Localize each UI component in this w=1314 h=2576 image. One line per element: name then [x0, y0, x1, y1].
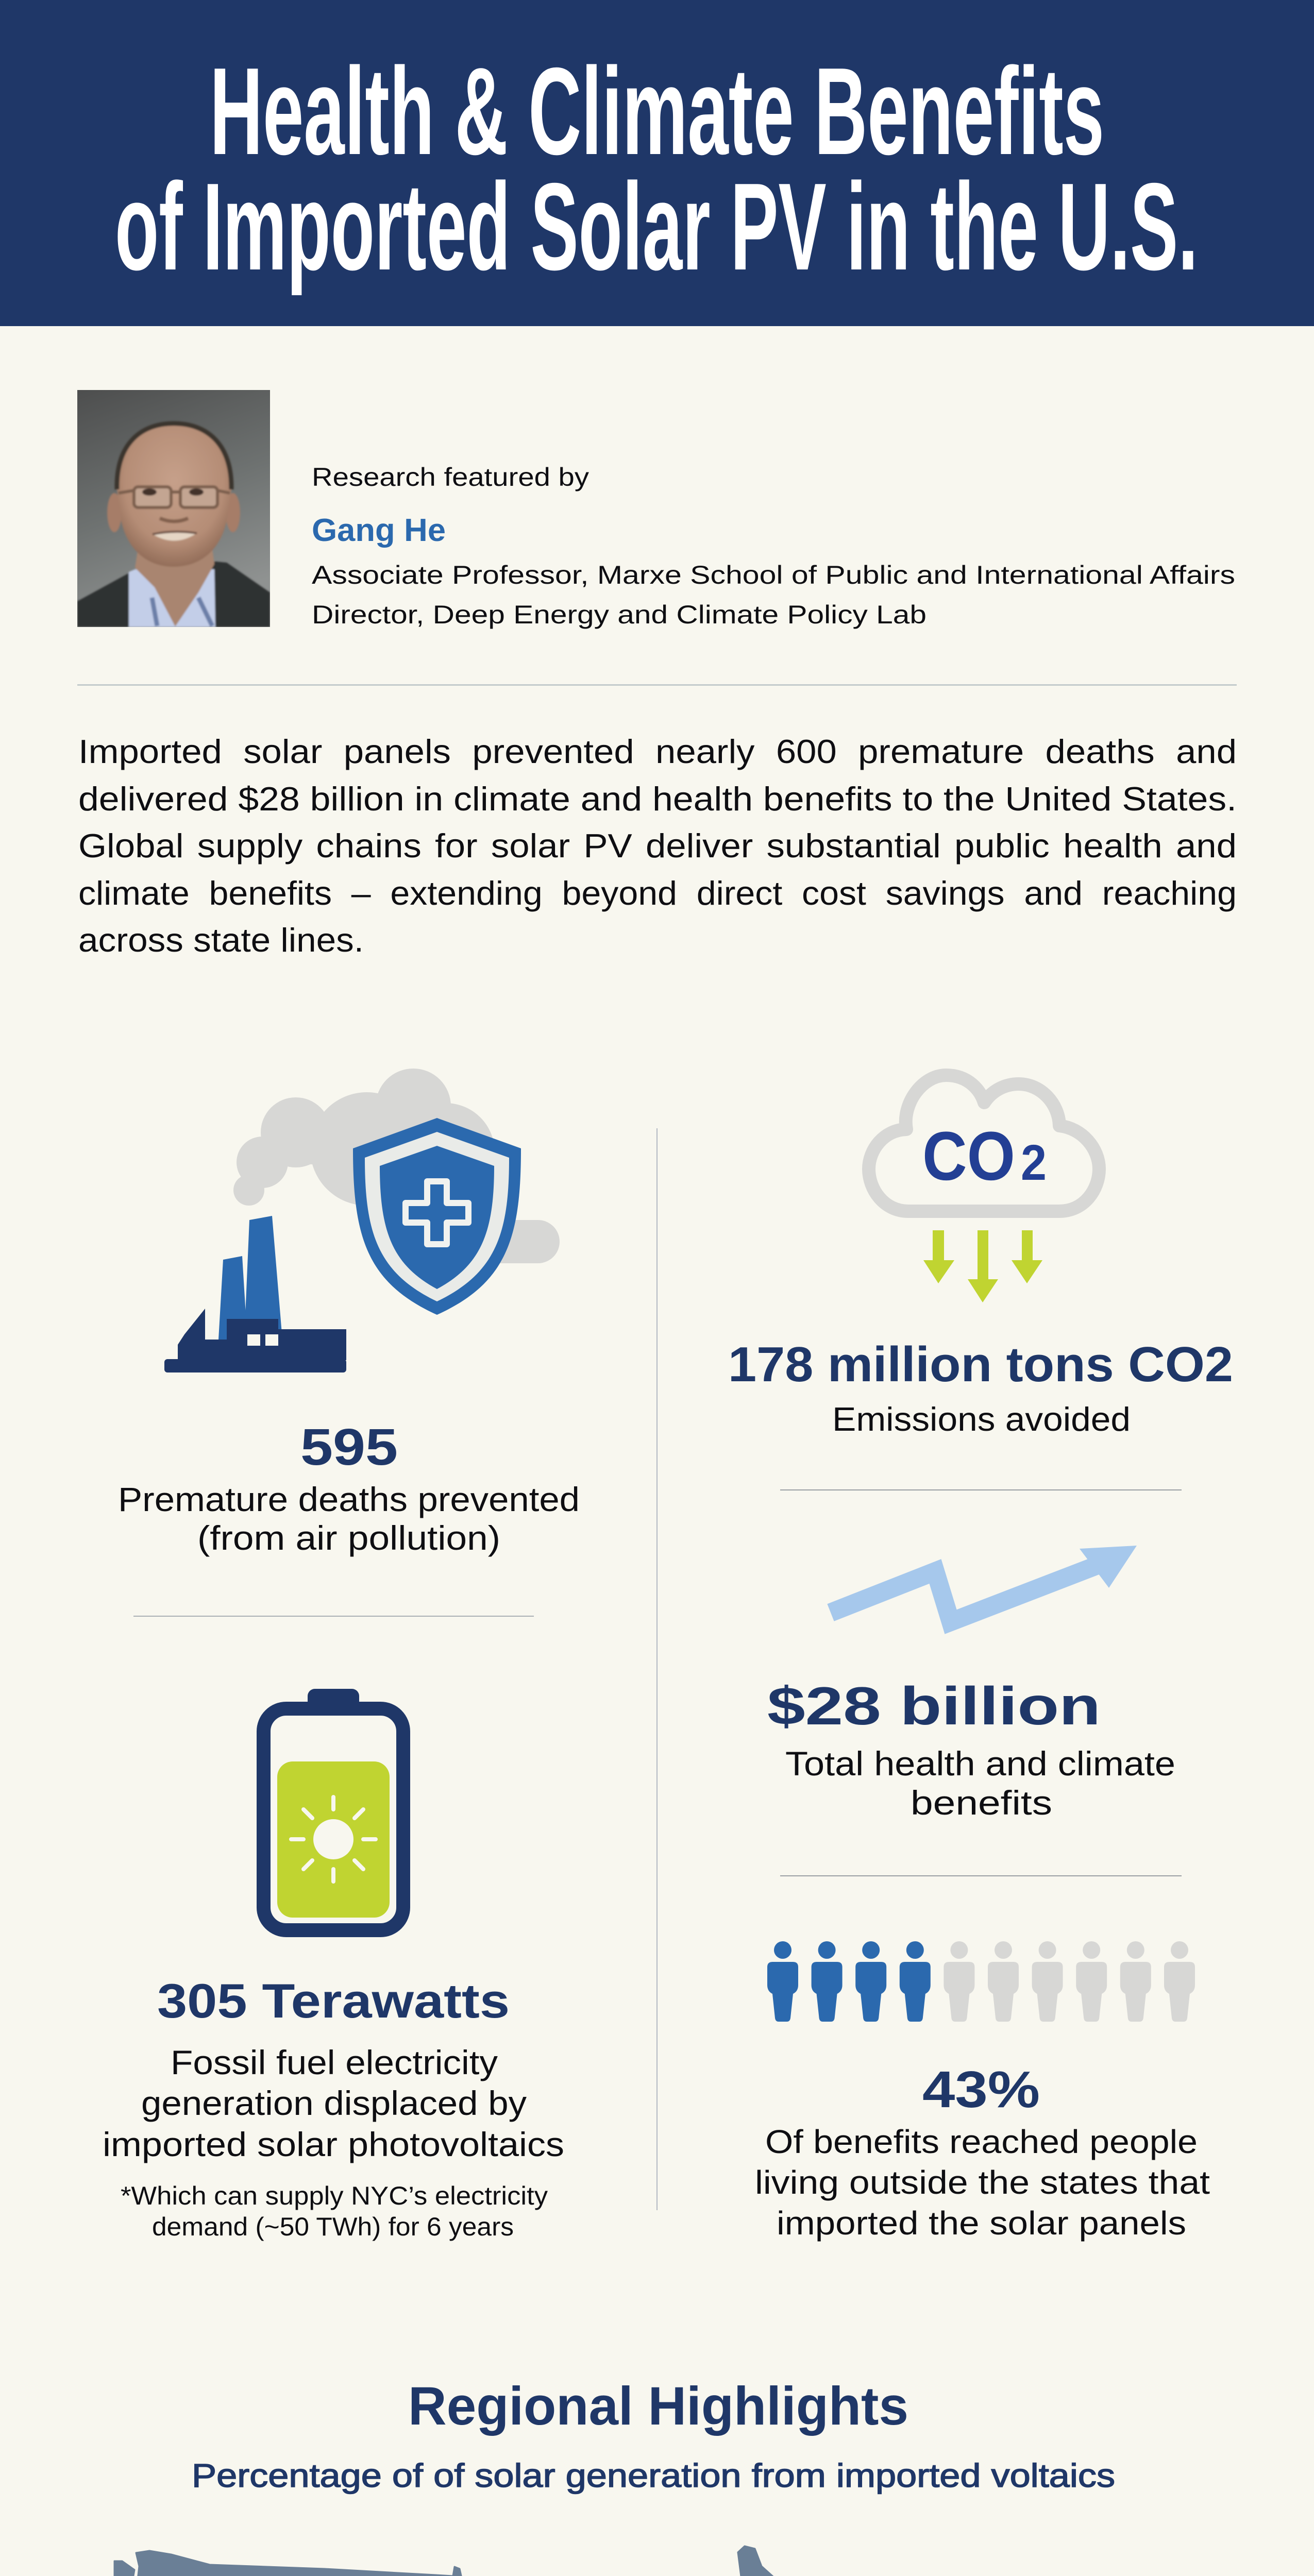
icon: CO2 cloud with down arrows — [869, 1075, 1099, 1302]
icon: smoke cloud, factory and health shield — [164, 1069, 560, 1372]
icon: rising arrow — [831, 1546, 1137, 1622]
panel: fossil fuel generation displaced: generation displaced by — [141, 2084, 527, 2122]
panel: fossil fuel generation displaced: 305 Terawatts — [157, 1974, 510, 2028]
icon: CO2 cloud with down arrows: 2 — [1021, 1134, 1047, 1191]
intro paragraph: delivered $28 billion in climate and health benefits to the United States. — [78, 780, 1237, 818]
intro paragraph: climate benefits – extending beyond direct cost savings and reaching — [78, 874, 1237, 912]
panel: benefits outside states: Of benefits reached people — [765, 2123, 1198, 2160]
panel: premature deaths prevented: Premature deaths prevented — [118, 1480, 580, 1518]
panel: premature deaths prevented: (from air pollution) — [197, 1519, 500, 1557]
intro paragraph: Imported solar panels prevented nearly 600 premature deaths and — [78, 733, 1237, 770]
title — [115, 42, 1198, 296]
portrait photo — [77, 390, 270, 627]
panel: researcher — [77, 390, 1235, 629]
intro paragraph: Global supply chains for solar PV deliver substantial public health and — [78, 827, 1237, 865]
panel: total benefits: $28 billion — [767, 1676, 1101, 1736]
map of the United States — [78, 2546, 779, 2576]
icon: battery with sun — [264, 1689, 403, 1930]
panel: total benefits — [767, 1546, 1175, 1822]
panel: fossil fuel generation displaced: Fossil fuel electricity — [171, 2043, 498, 2081]
panel: fossil fuel generation displaced: *Which can supply NYC’s electricity — [121, 2181, 548, 2210]
researcher text: Gang He — [312, 513, 446, 548]
subheading: regional: Percentage of of solar generation from imported voltaics — [192, 2457, 1115, 2494]
researcher text: Associate Professor, Marxe School of Public and International Affairs — [312, 561, 1235, 589]
panel: fossil fuel generation displaced — [103, 1689, 564, 2241]
panel: premature deaths prevented — [118, 1069, 580, 1557]
panel: emissions avoided: 178 million tons CO2 — [728, 1337, 1233, 1392]
researcher text: Research featured by — [312, 463, 589, 492]
icon: CO2 cloud with down arrows: CO — [922, 1118, 1015, 1195]
panel: premature deaths prevented: 595 — [300, 1418, 398, 1476]
icon: ten people, four highlighted — [767, 1941, 1195, 2022]
panel: total benefits: benefits — [911, 1784, 1052, 1822]
panel: benefits outside states: 43% — [922, 2061, 1040, 2119]
shield — [353, 1118, 521, 1315]
panel: benefits outside states: imported the solar panels — [777, 2205, 1186, 2242]
panel: fossil fuel generation displaced: imported solar photovoltaics — [103, 2125, 564, 2163]
header banner — [0, 0, 1314, 326]
panel: emissions avoided: Emissions avoided — [832, 1400, 1131, 1438]
panel: fossil fuel generation displaced: demand (~50 TWh) for 6 years — [152, 2212, 514, 2241]
researcher text — [312, 463, 1235, 629]
panel: emissions avoided — [728, 1075, 1233, 1438]
factory — [164, 1216, 346, 1372]
intro paragraph — [78, 733, 1237, 959]
heading: regional highlights: Regional Highlights — [408, 2376, 908, 2436]
panel: total benefits: Total health and climate — [785, 1744, 1175, 1783]
panel: benefits outside states — [755, 1941, 1210, 2242]
researcher text: Director, Deep Energy and Climate Policy Lab — [312, 600, 926, 629]
intro paragraph: across state lines. — [78, 921, 364, 959]
panel: benefits outside states: living outside the states that — [755, 2164, 1210, 2201]
